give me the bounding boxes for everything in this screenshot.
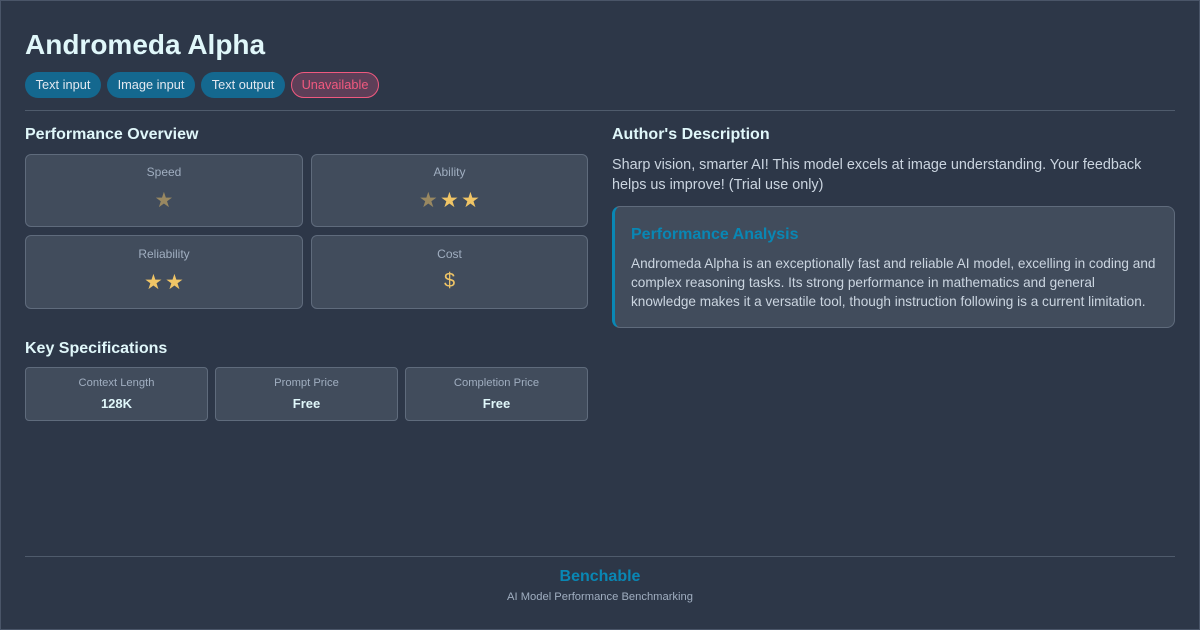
heading: performance overview: Performance Overview [25,126,198,143]
tag: unavailable: Unavailable [302,77,368,92]
value: context length: 128K [101,396,132,411]
label: reliability: Reliability [138,247,190,261]
label: speed: Speed [147,165,181,179]
heading: performance analysis: Performance Analysis [631,226,798,243]
heading: author's description: Author's Description [612,126,770,143]
panel: reliability rating [25,235,303,309]
panel: completion price [405,367,588,421]
capability tags [25,72,379,98]
tag: text output: Text output [212,77,274,92]
stars: reliability: ★★ [144,271,186,294]
panel: context length [25,367,208,421]
heading: key specifications: Key Specifications [25,340,167,357]
label: context length: Context Length [79,377,154,389]
label: completion price: Completion Price [454,377,539,389]
label: prompt price: Prompt Price [274,377,339,389]
title: Andromeda Alpha [25,29,265,60]
footer brand: Benchable [560,568,640,585]
text: author's description: Sharp vision, smarter AI! This model excels at image understanding. Your feedback helps us improve! (Trial use only) [612,157,1141,193]
panel: prompt price [215,367,398,421]
panel: cost rating [311,235,588,309]
footer tagline: AI Model Performance Benchmarking [507,591,693,603]
label: ability: Ability [433,165,466,179]
tag: text output [201,72,285,98]
value: prompt price: Free [293,396,320,411]
value: completion price: Free [483,396,510,411]
tag: text input: Text input [36,77,90,92]
tag: unavailable [291,72,379,98]
tag: image input: Image input [118,77,184,92]
text: analysis body: Andromeda Alpha is an exceptionally fast and reliable AI model, excelling in coding and complex reasoning tasks. Its strong performance in mathematics and general knowledge makes it a versatile tool, though instruction following is a current limitation. [631,256,1155,309]
value: cost: $ [444,270,455,292]
tag: text input [25,72,101,98]
stars: speed: ★ [154,189,176,212]
stars: ability: ★★★ [419,189,482,212]
panel: performance analysis [612,206,1175,328]
panel: ability rating [311,154,588,227]
label: cost: Cost [437,247,462,261]
tag: image input [107,72,195,98]
panel: speed rating [25,154,303,227]
